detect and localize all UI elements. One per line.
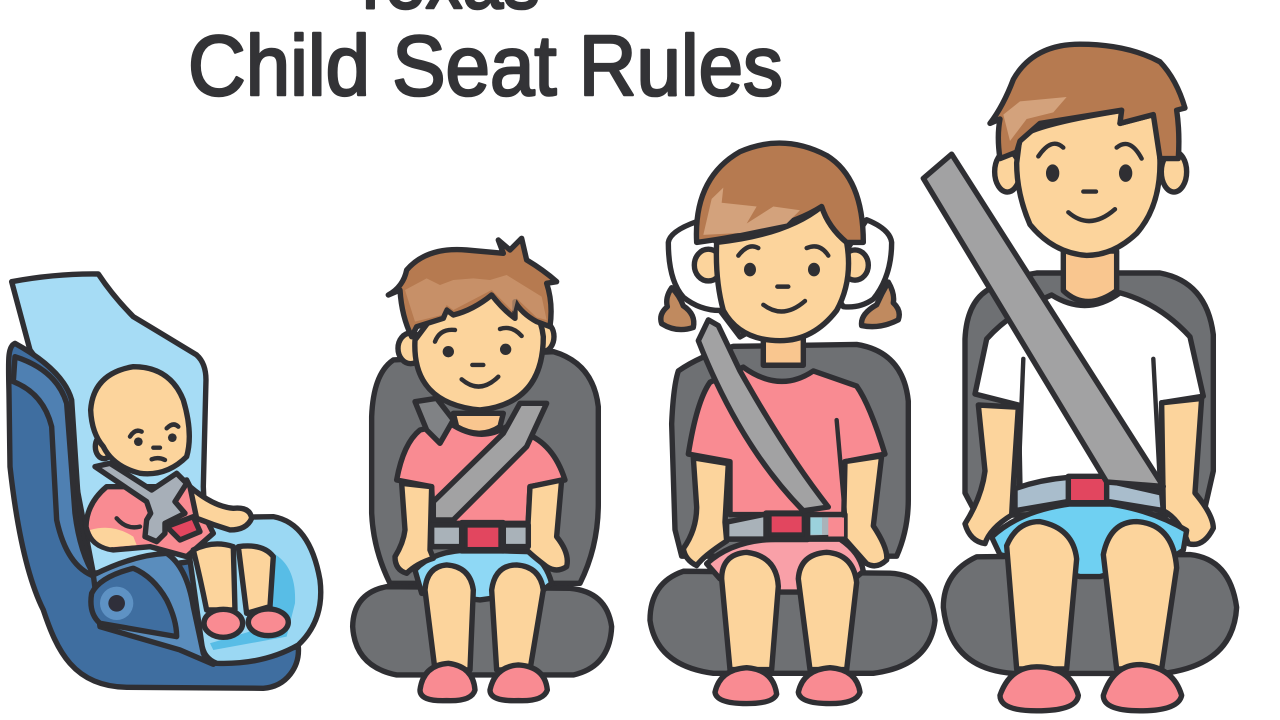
shirt [688, 367, 885, 515]
shorts [992, 504, 1187, 577]
pigtails [661, 282, 899, 330]
baby body [86, 463, 252, 557]
figure: toddler in high-back booster [353, 238, 612, 701]
shorts [415, 550, 552, 600]
cushion shade [210, 553, 295, 650]
baby legs and shoes [193, 544, 288, 637]
title: Child Seat Rules [188, 19, 783, 114]
figure: older child with adult seat belt [923, 44, 1237, 711]
figure: infant in rear-facing seat [9, 274, 321, 688]
baby head [91, 367, 189, 474]
shirt [397, 423, 565, 523]
lap belt and buckle [727, 513, 845, 540]
booster base [943, 555, 1237, 673]
shoulder straps [415, 398, 547, 520]
lap belt and buckle [432, 523, 528, 551]
shoulder belt [698, 320, 828, 511]
booster base [650, 571, 935, 673]
white headrest wings [668, 220, 892, 337]
head [694, 143, 868, 341]
shoulder belt [923, 154, 1163, 486]
infant seat shell [9, 343, 298, 688]
legs and shoes [1000, 522, 1182, 711]
legs and shoes [420, 565, 547, 701]
legs and shoes [715, 552, 860, 704]
infant seat inner band [13, 357, 95, 577]
skirt [707, 539, 863, 592]
booster backrest [965, 273, 1213, 515]
neck [453, 413, 503, 433]
neck [1063, 251, 1117, 302]
lap belt and buckle [1015, 476, 1163, 511]
armrest recess [91, 568, 177, 637]
head [990, 44, 1187, 255]
infant seat armrest [93, 553, 213, 664]
booster backrest [672, 344, 908, 556]
booster backrest [372, 352, 598, 583]
infant seat cushion [187, 517, 321, 663]
booster base [353, 587, 612, 675]
knob [100, 587, 133, 620]
arms [683, 420, 887, 566]
head [388, 238, 557, 410]
neck [763, 337, 803, 365]
infant seat headrest panel [12, 274, 207, 573]
arms [965, 359, 1213, 544]
white shirt [975, 293, 1203, 489]
figure: girl in backless booster [650, 143, 935, 704]
arms [395, 480, 567, 573]
